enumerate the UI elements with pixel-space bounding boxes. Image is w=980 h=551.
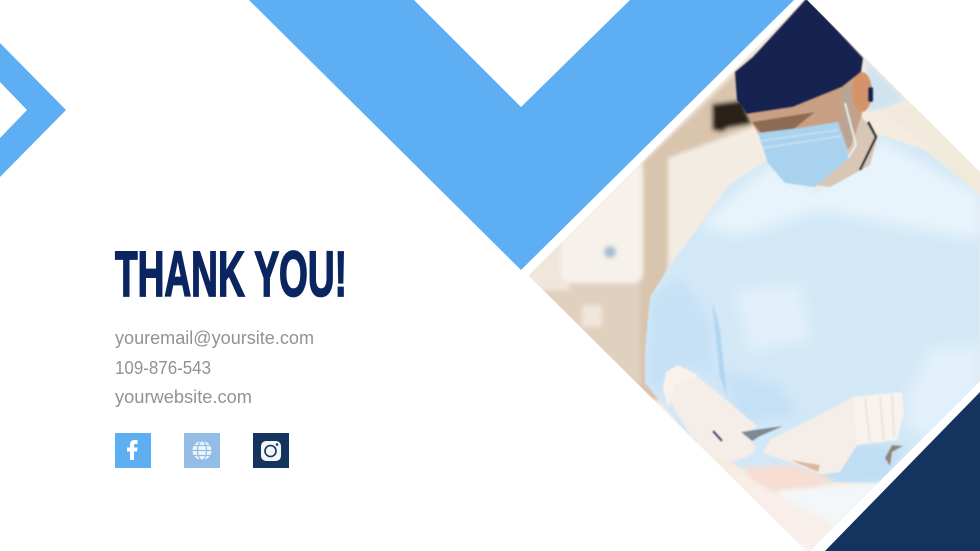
website: yourwebsite.com <box>115 387 252 407</box>
photo: surgeon in diamond frame <box>520 0 980 551</box>
large blue chevron <box>249 0 794 270</box>
phone: 109-876-543 <box>115 358 211 378</box>
photo backdrop <box>520 0 980 551</box>
heading: THANK YOU! <box>115 238 347 310</box>
gown <box>645 135 980 484</box>
head with mask and cap <box>735 0 878 187</box>
icon: globe <box>184 433 220 468</box>
contact details <box>115 328 314 407</box>
icon: instagram <box>253 433 289 468</box>
navy corner triangle <box>825 392 980 551</box>
gloved hands with forceps <box>663 365 904 475</box>
email: youremail@yoursite.com <box>115 328 314 348</box>
left chevron arrow <box>0 43 66 177</box>
patient and drape <box>725 465 880 551</box>
icon: facebook <box>115 433 151 468</box>
